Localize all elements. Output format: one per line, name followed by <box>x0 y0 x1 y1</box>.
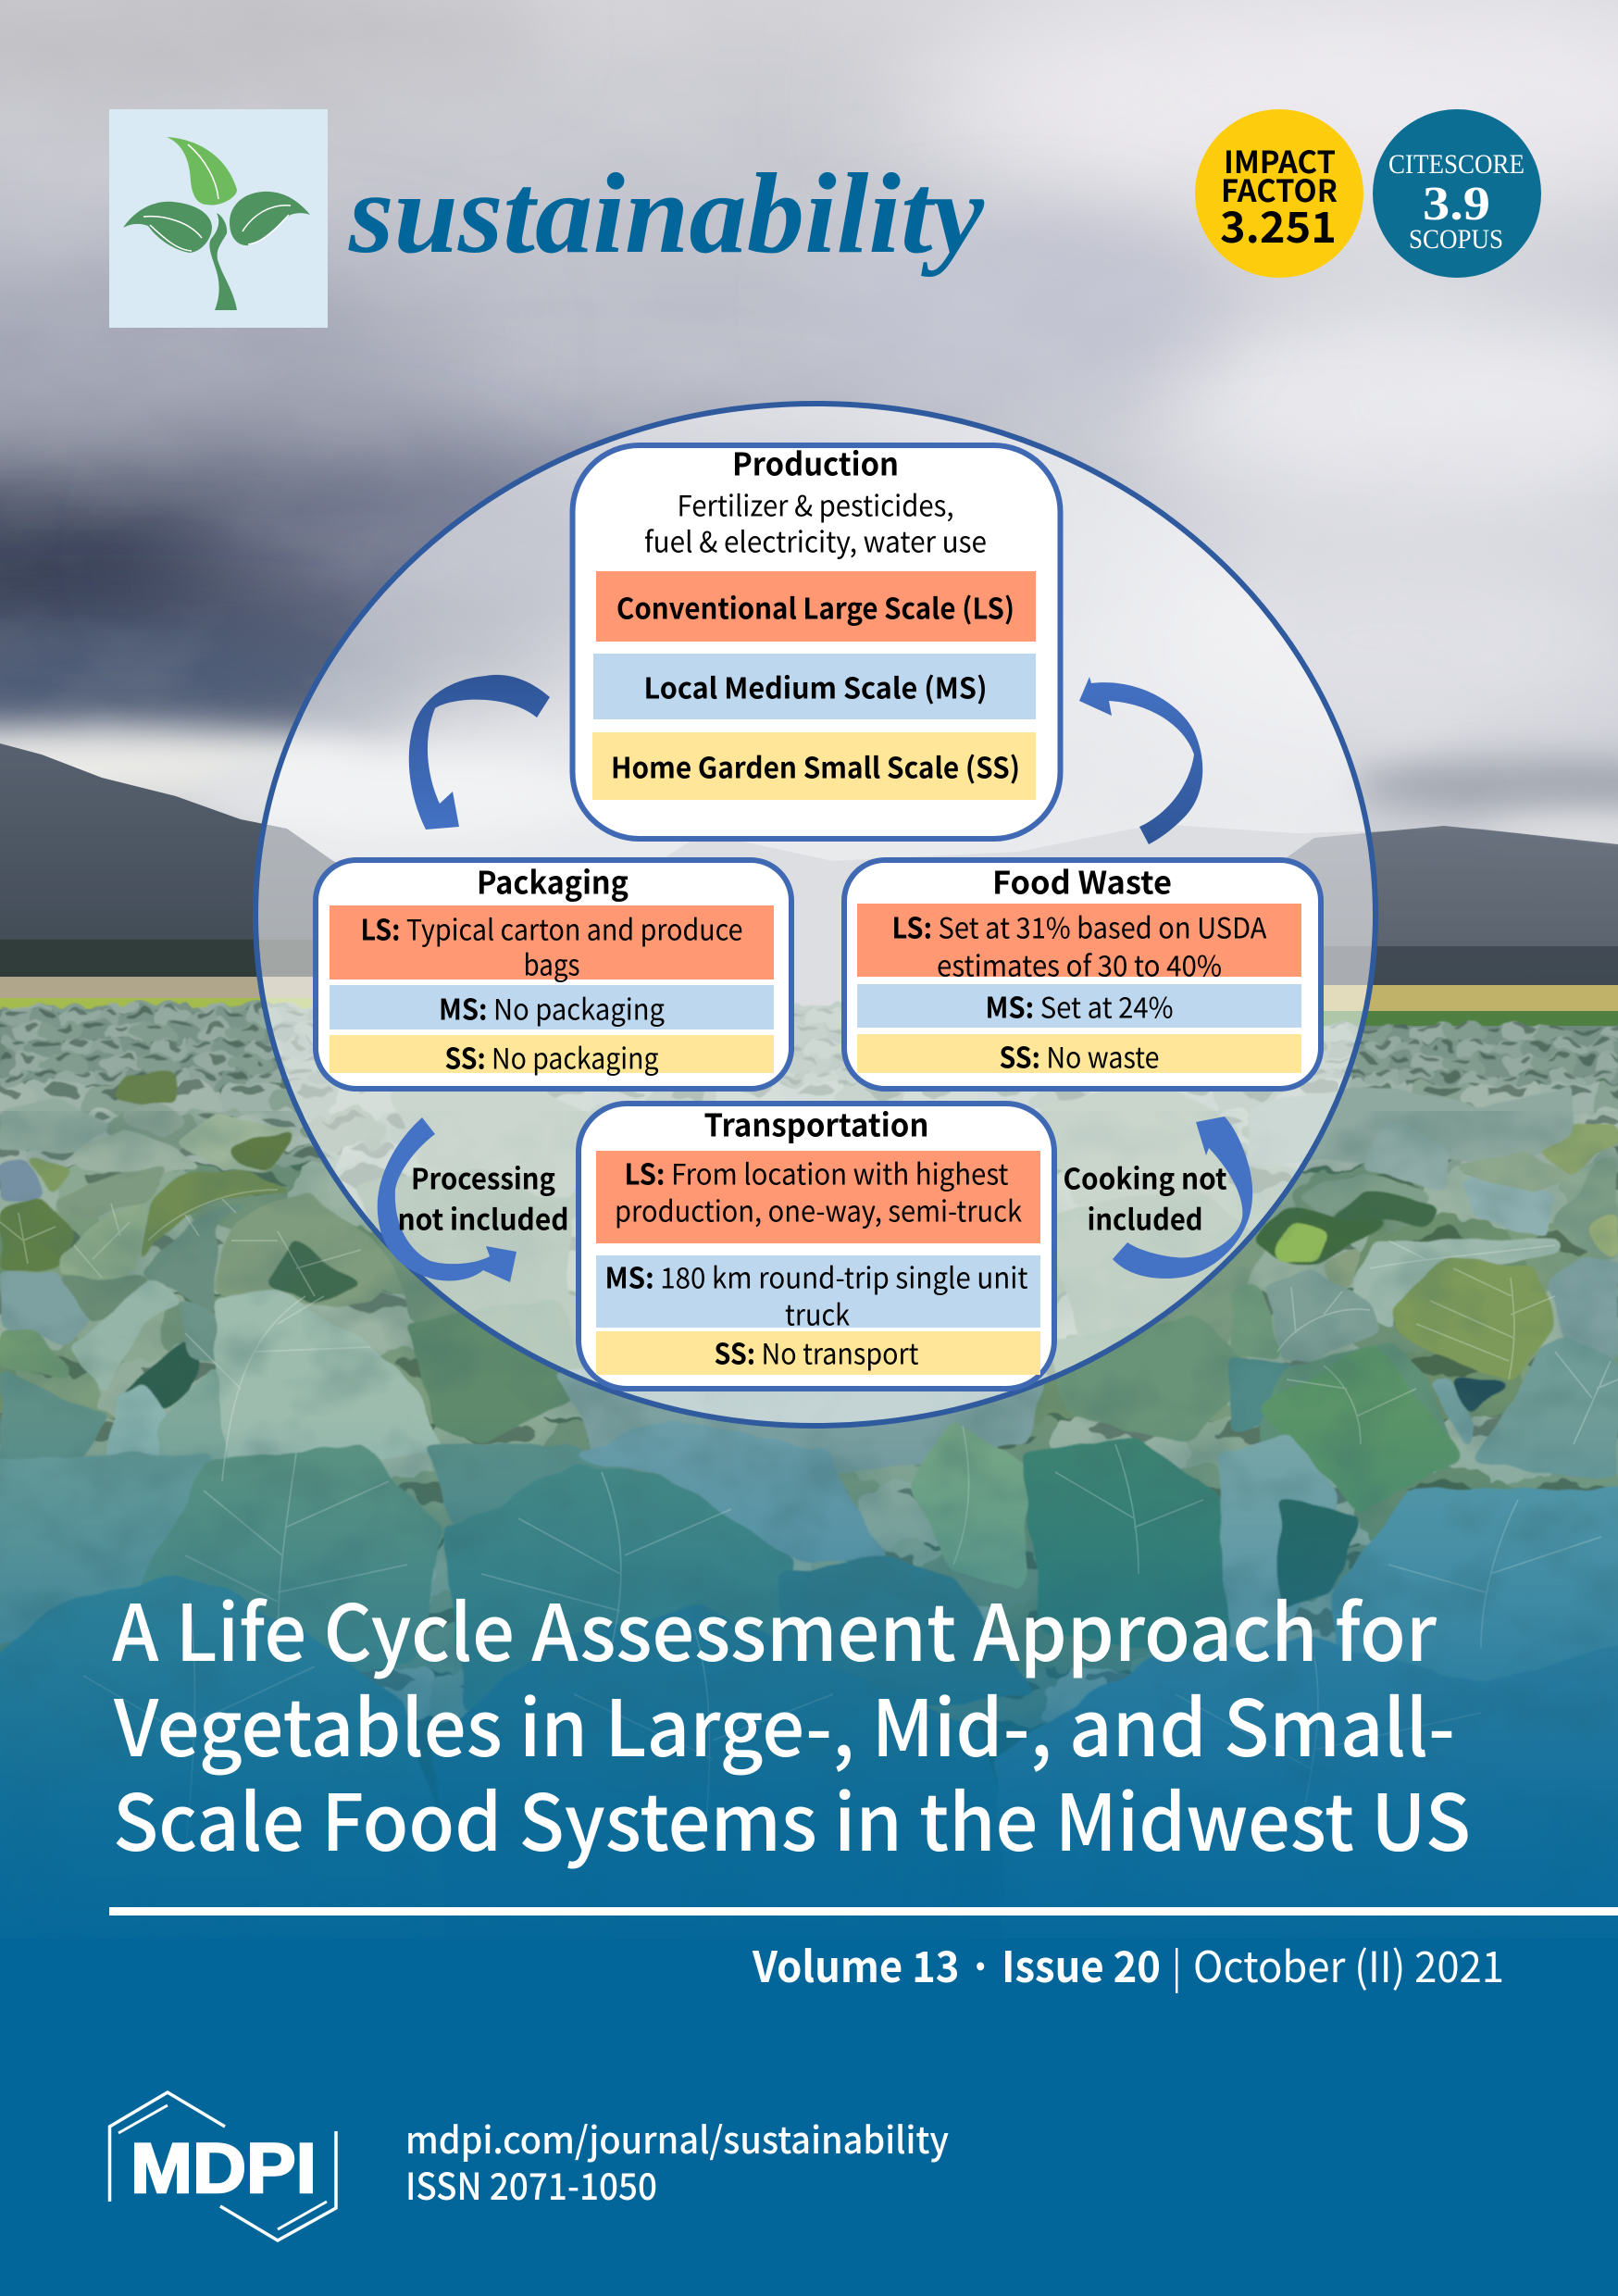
label: processing not included <box>398 1155 568 1239</box>
diagram background ellipse <box>255 404 1375 1426</box>
MDPI logo <box>109 2092 336 2240</box>
badge: impact factor <box>1195 109 1363 278</box>
panel: production: fuel & electricity, water use <box>644 518 987 561</box>
journal logo tile <box>109 109 328 328</box>
arrow: production to packaging <box>409 675 550 830</box>
article title: A Life Cycle Assessment Approach for <box>112 1572 1438 1684</box>
arrow: transportation to food waste <box>1113 1117 1252 1279</box>
label: cooking not included <box>1063 1155 1227 1239</box>
leaves: right cluster <box>1535 1123 1618 1176</box>
panel: transportation <box>579 1100 1054 1389</box>
journal url and ISSN: mdpi.com/journal/sustainability <box>405 2111 949 2165</box>
diagram: life cycle system boundary <box>255 404 1375 1426</box>
badge: impact factor: 3.251 <box>1220 194 1337 256</box>
icon: stem <box>209 213 237 310</box>
leaves: lower foreground <box>0 1454 213 1648</box>
issue line <box>752 1934 1504 1995</box>
badge: citescore: 3.9 <box>1423 178 1490 231</box>
article title: Scale Food Systems in the Midwest US <box>113 1762 1471 1874</box>
article title <box>112 1572 1471 1874</box>
panel: packaging: MS: No packaging <box>439 987 665 1028</box>
badge: citescore: CITESCORE <box>1388 149 1525 180</box>
badge: impact factor: FACTOR <box>1221 167 1338 211</box>
panel: packaging: LS: Typical carton and produce <box>361 907 742 948</box>
panel: food waste: LS: Set at 31% based on USDA <box>892 905 1267 946</box>
label: processing not included: Processing <box>411 1155 555 1198</box>
label: processing not included: not included <box>398 1196 568 1239</box>
background: mountains and tree line <box>0 743 1618 1029</box>
badge: citescore <box>1373 109 1541 278</box>
panel: packaging: Packaging <box>477 857 629 904</box>
label: cooking not included: Cooking not <box>1063 1155 1227 1198</box>
background: sky with storm clouds <box>0 0 1618 1018</box>
panel: packaging: SS: No packaging <box>444 1035 659 1078</box>
background: leaf veins <box>0 1190 1618 1852</box>
panel: transportation: LS: From location with highest <box>624 1152 1009 1192</box>
panel: food waste: MS: Set at 24% <box>985 985 1174 1026</box>
icon: right leaf <box>230 192 310 245</box>
panel: production: Home Garden Small Scale (SS) <box>611 744 1020 787</box>
title rule <box>109 1907 1618 1915</box>
panel: production: Local Medium Scale (MS) <box>644 665 987 707</box>
panel: packaging <box>316 857 791 1089</box>
background: cabbage field <box>0 1004 1618 1953</box>
panel: food waste: SS: No waste <box>1000 1035 1159 1076</box>
panel: production <box>572 439 1061 839</box>
panel: food waste: Food Waste <box>992 857 1172 904</box>
panel: packaging: bags <box>524 942 579 983</box>
leaves: central area under the diagram <box>389 1079 611 1194</box>
issue line: October (II) 2021 <box>1193 1934 1504 1995</box>
journal url and ISSN: ISSN 2071-1050 <box>405 2157 657 2211</box>
label: cooking not included: included <box>1087 1196 1203 1239</box>
journal url and ISSN <box>405 2111 949 2211</box>
panel: transportation: SS: No transport <box>715 1331 919 1372</box>
background: mid-field shading <box>0 1111 1618 1944</box>
panel: production: Production <box>732 439 899 485</box>
panel: transportation: production, one-way, semi-truck <box>615 1189 1022 1229</box>
leaves: far left cluster <box>108 1074 176 1104</box>
arrow: packaging to transportation <box>378 1117 517 1282</box>
icon: top leaf <box>167 137 237 206</box>
panel: food waste <box>844 857 1321 1089</box>
panel: production: Fertilizer & pesticides, <box>678 483 953 524</box>
background: blue fade and footer band <box>0 1416 1618 2296</box>
issue line: Volume 13 · Issue 20 <box>752 1934 1161 1995</box>
panel: transportation: MS: 180 km round-trip single unit <box>605 1255 1028 1296</box>
journal name: sustainability <box>348 150 985 277</box>
panel: food waste: estimates of 30 to 40% <box>937 942 1222 985</box>
MDPI logo: MDPI <box>131 2129 317 2208</box>
icon: left leaf <box>123 202 212 253</box>
badge: citescore: SCOPUS <box>1409 224 1503 255</box>
badge: impact factor: IMPACT <box>1224 138 1336 182</box>
arrow: food waste to production <box>1079 677 1202 844</box>
panel: transportation: truck <box>785 1292 850 1333</box>
article title: Vegetables in Large-, Mid-, and Small- <box>113 1667 1455 1779</box>
panel: transportation: Transportation <box>703 1100 929 1146</box>
panel: production: Conventional Large Scale (LS) <box>616 585 1014 628</box>
